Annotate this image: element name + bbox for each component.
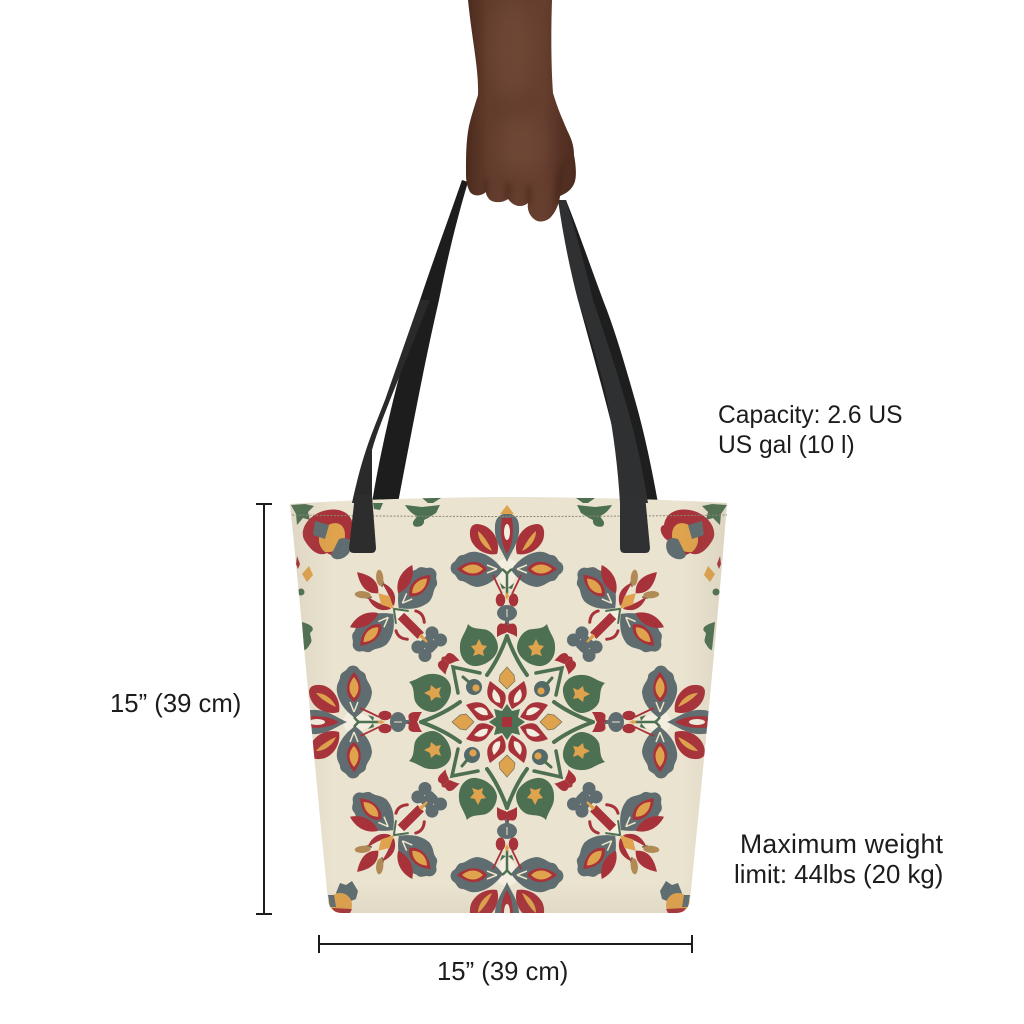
- side red drops: [296, 556, 721, 569]
- corner motif top left: [303, 510, 356, 559]
- corner motif bottom left: [328, 881, 358, 913]
- capacity label: US gal (10 l): [718, 432, 855, 459]
- weight limit label: limit: 44lbs (20 kg): [734, 861, 943, 889]
- corner motif bottom right: [660, 881, 690, 913]
- floral pattern: [290, 497, 727, 939]
- strap patch right: [620, 495, 650, 553]
- hand and arm: [466, 0, 576, 222]
- central medallion: [409, 624, 605, 820]
- horizontal dimension line: [319, 935, 692, 953]
- strap patch left: [349, 495, 376, 553]
- knuckle shadows: [483, 15, 563, 204]
- back strap right: [558, 200, 658, 503]
- weight limit label: Maximum weight: [740, 829, 944, 859]
- stitch line: [292, 515, 727, 516]
- corner motif top right: [661, 510, 714, 559]
- front strap left: [349, 300, 430, 553]
- cloth shading: [290, 502, 727, 722]
- weight limit label: [734, 829, 944, 889]
- width label: 15” (39 cm): [437, 958, 568, 986]
- height label: 15” (39 cm): [110, 690, 241, 718]
- capacity label: Capacity: 2.6 US: [718, 402, 903, 429]
- vertical dimension line: [256, 504, 272, 914]
- top edge green motifs: [291, 498, 727, 650]
- diagonal motifs: [317, 532, 697, 912]
- side orange drops: [302, 566, 715, 582]
- front strap right: [558, 200, 650, 553]
- large motifs: [290, 505, 724, 939]
- bag body: [290, 497, 727, 939]
- back strap left: [372, 180, 468, 503]
